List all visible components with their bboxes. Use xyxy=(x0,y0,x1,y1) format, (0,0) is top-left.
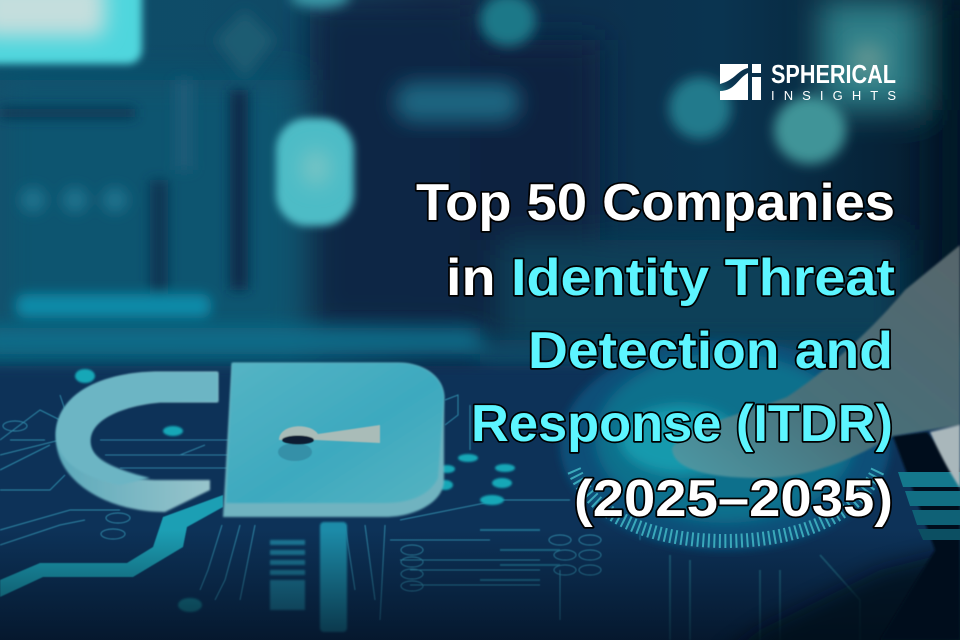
dark chip area xyxy=(880,432,960,640)
teal circuit paths and solder pads xyxy=(0,369,515,632)
title line 5: (2025–2035) xyxy=(574,470,893,528)
fingerprint sensor dial xyxy=(560,340,890,550)
logo subline: INSIGHTS xyxy=(771,88,896,103)
padlock shackle xyxy=(56,372,218,512)
logo: Spherical Insights xyxy=(720,59,896,103)
title line 3: Detection and xyxy=(528,322,893,380)
title line 4: Response (ITDR) xyxy=(471,395,893,453)
padlock body xyxy=(223,363,444,517)
circuit traces xyxy=(0,395,860,640)
padlock keyhole xyxy=(278,425,380,461)
background: bright blurred lights xyxy=(0,0,886,226)
title line 2: in Identity Threat xyxy=(446,249,895,307)
title line 1: Top 50 Companies xyxy=(416,174,895,232)
padlock xyxy=(56,363,444,517)
logo wordmark: SPHERICAL xyxy=(771,59,896,89)
lower scene: circuit board xyxy=(0,328,960,640)
title xyxy=(416,174,895,528)
logo mark xyxy=(720,64,761,100)
fingertip xyxy=(672,245,960,488)
bottom vignette xyxy=(0,530,960,640)
